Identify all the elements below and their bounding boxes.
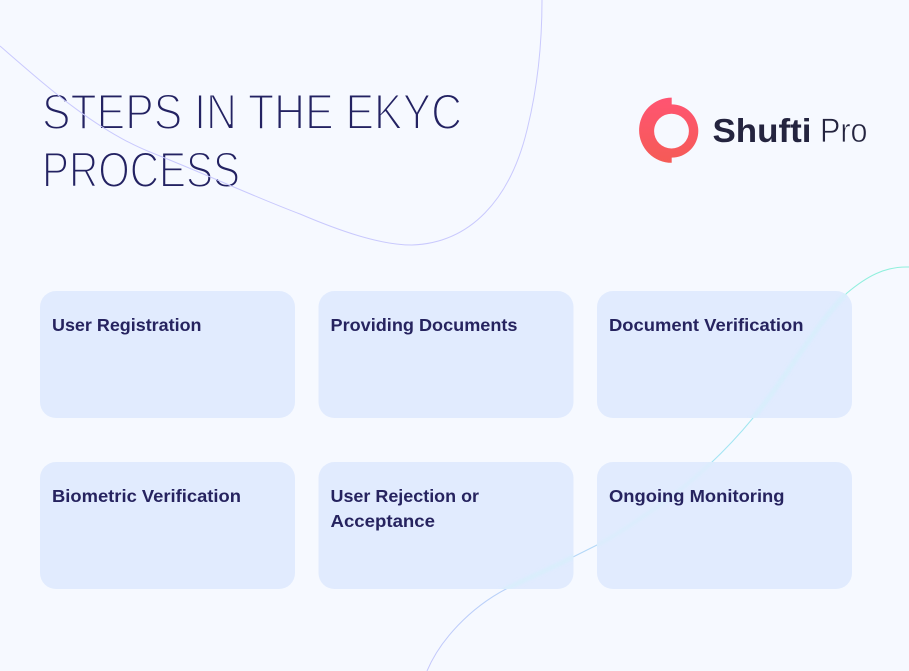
panel: user registration — [40, 291, 295, 418]
panel: ongoing monitoring: Ongoing Monitoring — [609, 486, 784, 506]
title: STEPS IN THE EKYC — [42, 84, 462, 140]
panel: user rejection or acceptance — [318, 462, 574, 589]
logo wordmark: Shufti — [712, 112, 812, 149]
panel: biometric verification: Biometric Verification — [52, 486, 241, 506]
decorative curve: teal — [427, 267, 909, 671]
panel: providing documents: Providing Documents — [330, 315, 518, 335]
panel: ongoing monitoring — [597, 462, 852, 589]
panel: user registration: User Registration — [52, 315, 202, 335]
panel: document verification: Document Verification — [609, 315, 804, 335]
decorative curve: purple — [0, 0, 542, 245]
panel: document verification — [597, 291, 852, 418]
panel: user rejection or acceptance: User Rejection or — [330, 486, 479, 506]
icon: logo ring — [639, 98, 698, 163]
panel: user rejection or acceptance: Acceptance — [330, 511, 435, 531]
title: PROCESS — [42, 142, 240, 198]
title — [42, 84, 462, 198]
logo: Shufti Pro — [639, 98, 868, 163]
panel: biometric verification — [40, 462, 295, 589]
logo wordmark: Pro — [820, 112, 868, 150]
panel: providing documents — [318, 291, 574, 418]
logo wordmark — [712, 112, 868, 150]
